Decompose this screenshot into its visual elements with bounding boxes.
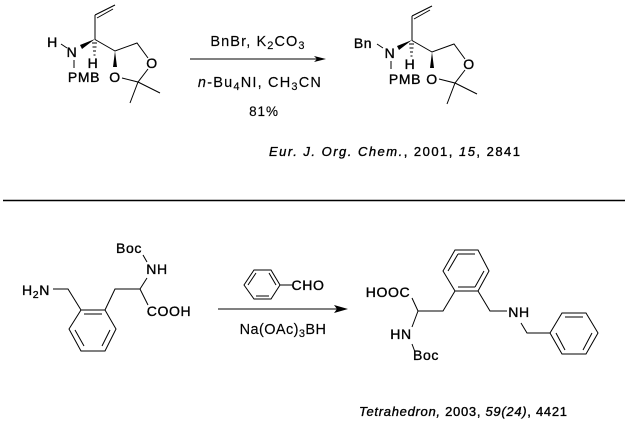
molecule: aminomethyl phenylalanine: 2 [33,289,39,301]
reaction conditions: benzylation: 4 [233,81,241,93]
molecule: starting amine with dioxolane: O [109,69,121,85]
molecule: aminomethyl phenylalanine: COOH [147,303,191,319]
reaction conditions: reductive amination: 3 [299,328,305,340]
molecule: N-benzyl amine product: HN [390,326,412,342]
divider line [3,200,625,202]
reaction conditions: benzylation [190,34,326,119]
molecule: aminomethyl phenylalanine: N [39,282,50,298]
reaction conditions: benzylation: 3 [291,81,299,93]
molecule: starting amine with dioxolane: N [67,44,77,60]
molecule: N-benzyl amine product: HOOC [366,284,410,300]
icon: benzaldehyde reagent: CHO [292,277,324,293]
molecule: aminomethyl phenylalanine: H [22,282,33,298]
reaction conditions: benzylation: 81% [249,104,279,119]
molecule: starting amine with dioxolane: H [47,34,58,50]
arrow: reaction 1 [190,56,326,62]
molecule: N-benzyl product: PMB [389,71,421,87]
reaction conditions: reductive amination: Na(OAc) [240,322,299,338]
reaction conditions: benzylation: 3 [298,40,306,52]
molecule: N-benzyl amine product: Boc [413,347,439,363]
molecule: N-benzyl product [354,6,477,104]
molecule: N-benzyl product: Bn [354,35,372,51]
reaction conditions: reductive amination [218,270,348,340]
molecule: N-benzyl product: H [405,56,415,72]
molecule: aminomethyl phenylalanine [22,240,191,351]
molecule: N-benzyl product: N [385,45,395,61]
molecule: N-benzyl product: O [426,71,438,87]
reaction conditions: benzylation: BnBr, K [210,34,267,50]
molecule: starting amine with dioxolane: O [146,55,158,71]
reaction conditions: benzylation: NI, CH [241,75,291,91]
citation: Tetrahedron: Tetrahedron, 2003, 59(24), 4421 [359,404,567,419]
reaction conditions: benzylation: n-Bu [198,75,233,91]
arrow: reaction 2 [218,305,348,313]
reaction conditions: reductive amination: BH [305,322,326,338]
molecule: aminomethyl phenylalanine: NH [146,261,168,277]
molecule: N-benzyl amine product: NH [508,304,530,320]
molecule: N-benzyl amine product [366,250,598,363]
reaction conditions: benzylation: 2 [267,40,274,52]
reaction conditions: benzylation: CO [274,34,298,50]
molecule: aminomethyl phenylalanine: Boc [116,240,142,256]
reaction conditions: benzylation: CN [299,75,322,91]
molecule: starting amine with dioxolane [47,5,160,103]
citation: Eur. J. Org. Chem.: Eur. J. Org. Chem., 2001, 15, 2841 [269,144,520,159]
molecule: starting amine with dioxolane: H [88,55,98,71]
molecule: starting amine with dioxolane: PMB [68,69,100,85]
molecule: N-benzyl product: O [463,56,475,72]
